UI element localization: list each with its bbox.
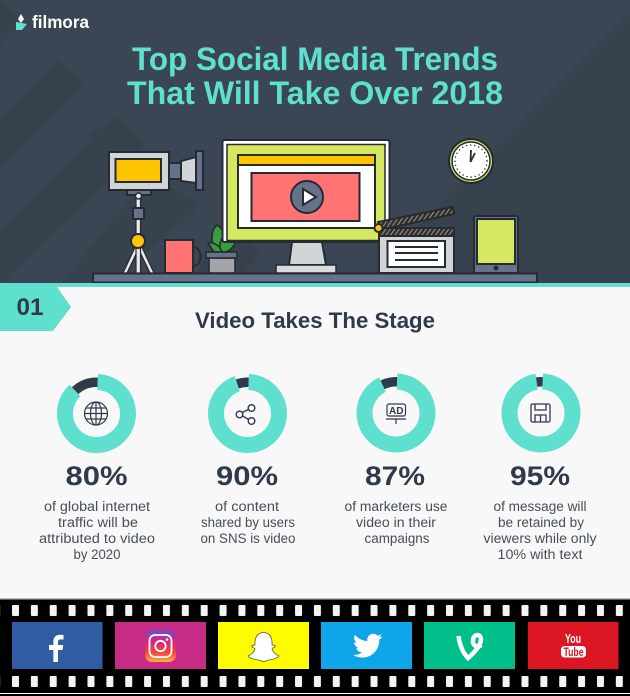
teal divider strip xyxy=(0,283,630,287)
description 95%: viewers while only xyxy=(484,531,597,546)
description 80% xyxy=(39,499,155,562)
icon: share xyxy=(236,405,255,424)
content section background xyxy=(0,284,630,599)
stat: 80% xyxy=(39,369,155,562)
illustration: tablet xyxy=(474,216,518,273)
illustration: potted plant xyxy=(206,224,237,273)
percentage 80%: 80% xyxy=(66,461,128,491)
description 95%: of message will xyxy=(494,499,586,514)
icon: AD board: AD xyxy=(389,406,403,417)
description 80%: attributed to video xyxy=(39,531,155,546)
stat: 90% xyxy=(200,374,296,546)
description 90% xyxy=(200,499,296,546)
description 95%: 10% with text xyxy=(498,547,583,562)
stat: 87% xyxy=(344,371,448,546)
donut chart 90% xyxy=(208,374,287,453)
description 95% xyxy=(484,499,597,562)
film strip xyxy=(0,598,630,696)
section number tag xyxy=(0,287,71,331)
section number tag: 01 xyxy=(16,294,44,321)
description 95%: be retained by xyxy=(498,515,584,530)
donut chart 80% xyxy=(52,369,141,458)
percentage 87%: 87% xyxy=(365,461,425,491)
illustration: film clapperboard xyxy=(374,207,454,273)
tile: YouTube xyxy=(528,622,618,669)
illustration: video camera on tripod xyxy=(109,151,203,273)
header background xyxy=(0,0,630,284)
illustration: coffee mug xyxy=(165,240,200,273)
tile: Snapchat xyxy=(218,622,309,669)
description 90%: of content xyxy=(215,499,279,514)
tile: YouTube: You xyxy=(565,631,581,646)
description 87% xyxy=(344,499,448,546)
tile: Facebook xyxy=(12,622,102,669)
description 87%: of marketers use xyxy=(344,499,448,514)
icon: globe xyxy=(84,402,108,425)
tile: YouTube: Tube xyxy=(564,647,584,659)
title xyxy=(127,41,503,111)
description 80%: by 2020 xyxy=(74,547,120,562)
description 87%: video in their xyxy=(356,515,437,530)
illustration: desk shelf xyxy=(93,274,537,282)
icon: floppy disk xyxy=(531,404,550,422)
title: That Will Take Over 2018 xyxy=(127,75,503,111)
donut chart 87% xyxy=(354,371,438,455)
tile: Instagram xyxy=(115,622,206,669)
section heading: Video Takes The Stage xyxy=(195,308,435,333)
description 80%: traffic will be xyxy=(58,515,138,530)
donut chart 95% xyxy=(506,378,576,448)
percentage 95%: 95% xyxy=(510,461,570,491)
description 90%: on SNS is video xyxy=(200,531,296,546)
title: Top Social Media Trends xyxy=(132,41,498,77)
description 87%: campaigns xyxy=(364,531,430,546)
illustration: desktop monitor with video player xyxy=(222,140,390,273)
description 80%: of global internet xyxy=(44,499,150,514)
description 90%: shared by users xyxy=(201,515,295,530)
stat: 95% xyxy=(484,378,597,562)
tile: Vine xyxy=(424,622,515,669)
tile: Twitter xyxy=(321,622,412,669)
illustration: wall clock xyxy=(448,138,494,184)
logo: filmora: filmora xyxy=(32,12,89,32)
icon: AD board xyxy=(386,404,406,424)
percentage 90%: 90% xyxy=(216,461,278,491)
